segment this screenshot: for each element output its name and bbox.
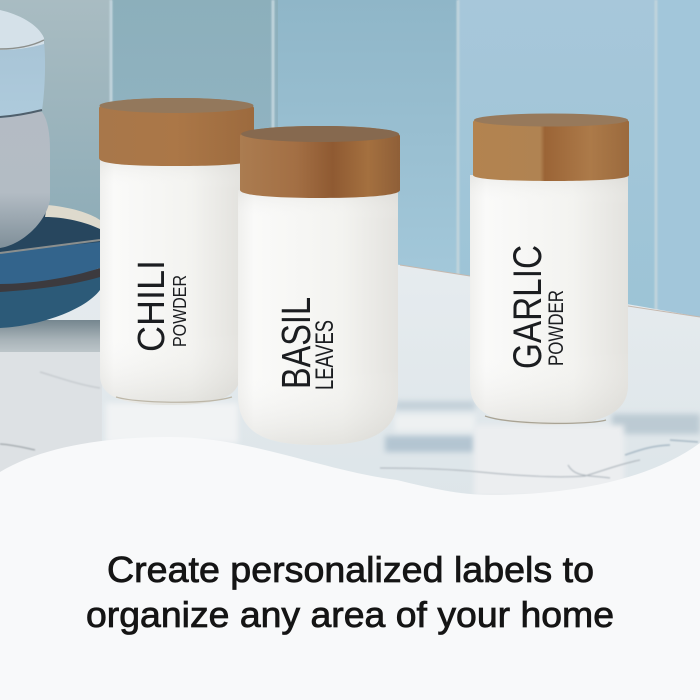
lid: garlic jar: [473, 114, 629, 181]
label: GARLIC POWDER: [506, 245, 568, 369]
label: CHILI POWDER: [131, 260, 190, 352]
plate shadow: [0, 320, 102, 352]
label: CHILI POWDER: POWDER: [170, 275, 190, 347]
jar shadow bands: [395, 401, 475, 410]
label: GARLIC POWDER: POWDER: [545, 290, 568, 366]
jar: basil leaves: [238, 126, 400, 445]
label: BASIL LEAVES: [273, 297, 339, 390]
label: BASIL LEAVES: BASIL: [273, 297, 319, 389]
lower bowl: [0, 110, 50, 248]
lid: basil jar: [240, 126, 400, 198]
white wave panel: [0, 437, 700, 700]
label: GARLIC POWDER: GARLIC: [506, 245, 550, 369]
lid: chili jar: [99, 98, 254, 166]
marble counter: [0, 205, 700, 500]
jar: garlic powder: [470, 114, 629, 425]
blue plate: [0, 240, 100, 284]
caption: [86, 549, 614, 635]
jar: chili powder: [99, 98, 254, 405]
stacked bowls and plates: [0, 10, 100, 328]
caption: Create personalized labels to: [107, 549, 594, 590]
upper bowl: [0, 42, 45, 118]
jar reflections: [106, 403, 238, 443]
bottom plate: [0, 270, 100, 328]
label: BASIL LEAVES: LEAVES: [311, 320, 339, 390]
tiled wall: [0, 0, 700, 325]
label: CHILI POWDER: CHILI: [131, 260, 173, 352]
caption: organize any area of your home: [86, 594, 614, 635]
